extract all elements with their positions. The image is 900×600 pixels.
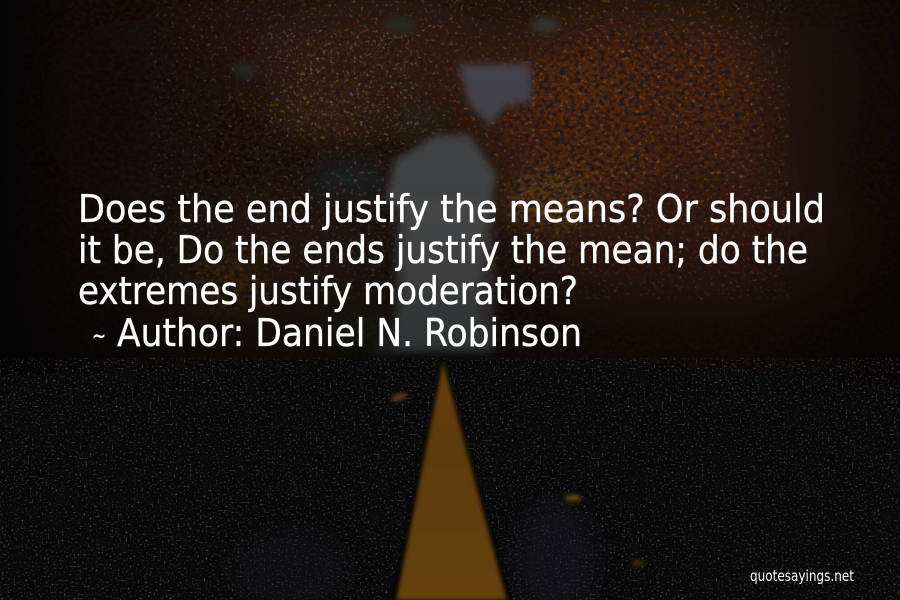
author line: Author: Daniel N. Robinson [117,311,582,355]
leaves mottling [70,0,886,346]
background: autumn forest canopy [44,0,900,357]
sky gap through trees [233,17,559,354]
grey leaf specks [270,30,420,140]
author line: ~ [92,322,106,350]
horizon darkening [0,0,900,390]
quote text [78,187,825,313]
quote text: it be, Do the ends justify the mean; do the [78,228,808,272]
road surface flecks [390,392,644,566]
road surface [0,358,900,600]
quote text: extremes justify moderation? [78,269,578,313]
quote text: Does the end justify the means? Or should [78,187,825,231]
watermark: quotesayings.net [750,567,854,585]
orange leaf specks [150,0,790,300]
road centre line [391,357,511,600]
